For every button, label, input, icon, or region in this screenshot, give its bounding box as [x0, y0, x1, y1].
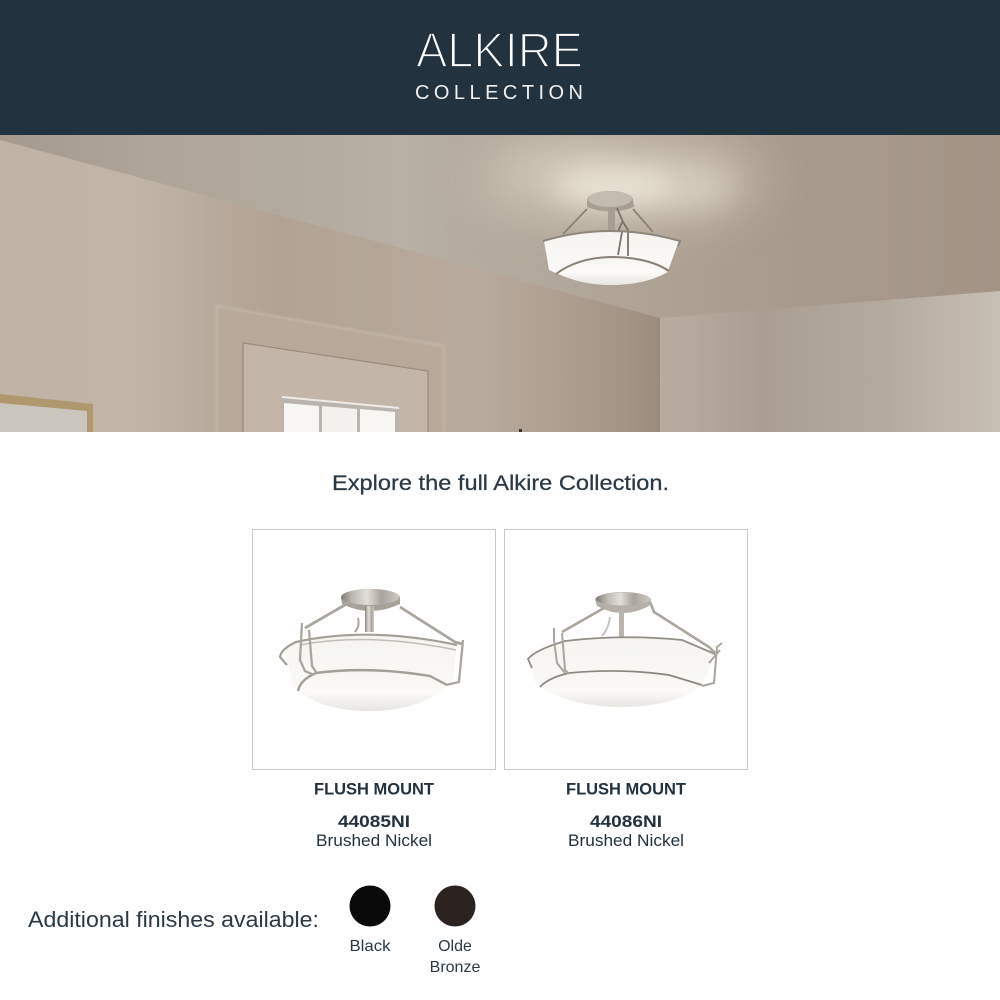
intro heading: Explore the full Alkire Collection.: [332, 472, 669, 495]
product card: 44086NI: [504, 530, 748, 770]
picture frame: [0, 394, 93, 432]
additional finishes heading: Additional finishes available:: [28, 907, 319, 932]
product label: 44086NI: FLUSH MOUNT: [566, 780, 686, 798]
finish swatch: black: [350, 886, 392, 955]
product label: 44085NI: [314, 780, 434, 850]
door panel: [243, 343, 428, 432]
header band: [0, 0, 1000, 135]
product label: 44085NI: Brushed Nickel: [316, 832, 432, 850]
fixture image 44085NI: [280, 589, 463, 711]
product label: 44086NI: Brushed Nickel: [568, 832, 684, 850]
finish swatch: olde bronze: Bronze: [430, 959, 480, 976]
finish swatch: olde bronze: Olde: [438, 938, 472, 955]
room photo: [0, 135, 1000, 432]
product label: 44085NI: FLUSH MOUNT: [314, 780, 434, 798]
subtitle: Collection: COLLECTION: [415, 82, 583, 104]
product label: 44085NI: 44085NI: [338, 813, 410, 831]
door window: [282, 397, 399, 432]
right wall: [660, 291, 1000, 432]
fixture image 44086NI: [528, 592, 722, 707]
door surround: [217, 306, 445, 432]
left wall: [0, 140, 660, 432]
finish swatch: black: Black: [350, 938, 392, 955]
wall hook: [519, 429, 522, 432]
title: Alkire: ALKIRE: [416, 24, 583, 78]
ceiling lamp: [543, 191, 680, 285]
finish swatch: olde bronze: [430, 886, 480, 976]
ceiling glow: [480, 140, 760, 220]
product label: 44086NI: 44086NI: [590, 813, 662, 831]
product label: 44086NI: [566, 780, 686, 850]
product card: 44085NI: [252, 530, 496, 770]
